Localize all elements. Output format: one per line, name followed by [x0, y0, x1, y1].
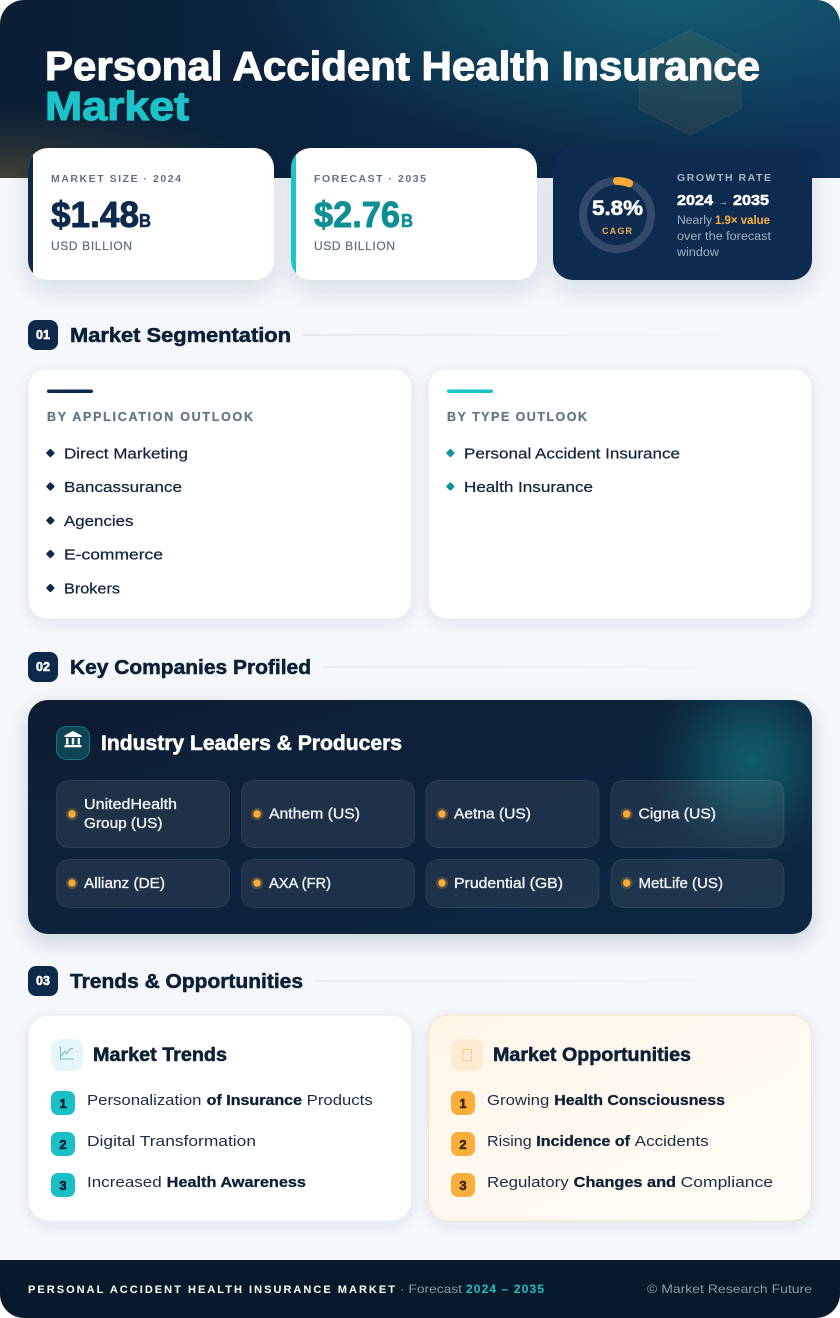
panel: by type outlook: Health Insurance — [464, 479, 593, 496]
stat card: forecast: B — [401, 211, 413, 231]
opportunity 3: Changes and — [574, 1174, 676, 1191]
section heading 01 — [28, 320, 570, 350]
stat card: market size: B — [139, 211, 151, 231]
opportunity 2 — [451, 1132, 709, 1156]
footer — [0, 1260, 840, 1318]
footer: · Forecast — [400, 1282, 463, 1296]
trend 1 — [51, 1091, 373, 1115]
company chip: Allianz — [56, 860, 230, 908]
opportunity 2: Incidence of — [536, 1133, 631, 1150]
trend 3: Increased — [87, 1174, 162, 1191]
company chip: MetLife — [611, 860, 784, 908]
company chip: Anthem: Anthem (US) — [269, 806, 360, 822]
trend 2 — [51, 1132, 256, 1156]
title — [47, 50, 760, 121]
growth text — [676, 172, 772, 259]
icon: line chart — [51, 1039, 83, 1071]
company chip: Cigna: Cigna (US) — [638, 806, 716, 822]
opportunity 1: Growing — [487, 1092, 549, 1109]
title: Personal Accident Health Insurance — [45, 43, 760, 89]
company chip: Aetna — [426, 780, 599, 848]
opportunity 3: 3 — [459, 1178, 467, 1193]
company chip: Prudential: Prudential (GB) — [454, 876, 563, 892]
panel: by application outlook: Direct Marketing — [64, 445, 188, 462]
company chip: Cigna — [611, 780, 784, 848]
company chip: UnitedHealth Group: Group (US) — [84, 816, 162, 832]
company chip: Allianz: Allianz (DE) — [84, 876, 165, 892]
panel: by application outlook: E-commerce — [64, 546, 163, 563]
company chip: Aetna: Aetna (US) — [454, 806, 531, 822]
section heading 02: Key Companies Profiled — [70, 657, 311, 679]
trend 1: Products — [307, 1092, 373, 1109]
growth text: 1.9× value — [715, 215, 770, 227]
opportunity 3: Compliance — [681, 1174, 773, 1191]
trend 1: of Insurance — [207, 1092, 302, 1109]
section heading 03: 03 — [36, 974, 50, 988]
company chip: AXA — [242, 860, 414, 908]
company chip: Anthem — [242, 780, 414, 848]
growth text: → — [719, 196, 728, 208]
footer: © Market Research Future — [647, 1282, 812, 1296]
growth text: 2024 — [677, 192, 714, 209]
company chip: AXA: AXA (FR) — [269, 876, 331, 892]
section heading 02: 02 — [36, 660, 50, 674]
section heading 03 — [28, 966, 576, 996]
trend 2: Digital Transformation — [87, 1133, 256, 1150]
opportunity 3: Regulatory — [487, 1174, 569, 1191]
stat card: market size: MARKET SIZE · 2024 — [51, 173, 181, 185]
company chip: Prudential — [426, 860, 599, 908]
opportunity 1: Health Consciousness — [554, 1092, 725, 1109]
stat card: forecast: FORECAST · 2035 — [314, 173, 426, 185]
panel: industry leaders — [28, 700, 812, 934]
panel: by type outlook: BY TYPE OUTLOOK — [447, 410, 587, 424]
company chip: MetLife: MetLife (US) — [638, 876, 723, 892]
stat card: forecast — [291, 148, 537, 280]
opportunity 2: Rising — [487, 1133, 532, 1150]
title: Market — [45, 83, 189, 129]
hero header — [0, 0, 840, 178]
opportunity 1: 1 — [459, 1096, 467, 1111]
company chip: UnitedHealth Group: UnitedHealth — [84, 797, 177, 813]
footer: PERSONAL ACCIDENT HEALTH INSURANCE MARKET — [28, 1284, 395, 1296]
section heading 03: Trends & Opportunities — [70, 971, 303, 993]
icon: bank — [56, 726, 90, 760]
section heading 01: Market Segmentation — [70, 325, 291, 347]
trend 3: 3 — [59, 1178, 67, 1193]
stat card: forecast: USD BILLION — [314, 239, 395, 253]
growth text: window — [676, 247, 720, 259]
panel: market opportunities — [428, 1015, 812, 1221]
panel: by application outlook: Brokers — [64, 580, 120, 597]
trend 1: 1 — [59, 1096, 67, 1111]
CAGR ring — [583, 181, 651, 249]
panel: market trends — [28, 1015, 412, 1221]
stat card: market size: $1.48 — [51, 194, 139, 235]
panel: by application outlook: BY APPLICATION OUTLOOK — [47, 410, 253, 424]
panel: by type outlook — [428, 369, 812, 619]
panel: by application outlook: Bancassurance — [64, 479, 182, 496]
CAGR ring: CAGR — [602, 226, 632, 236]
trend 1: Personalization — [87, 1092, 202, 1109]
trend 3 — [51, 1173, 306, 1197]
hexagon decoration — [639, 30, 741, 135]
growth text: GROWTH RATE — [677, 172, 771, 184]
growth text: 2035 — [733, 192, 769, 209]
trend 2: 2 — [59, 1137, 67, 1152]
section heading 01: 01 — [36, 328, 50, 342]
stat card: forecast: $2.76 — [314, 194, 400, 235]
growth text: over the forecast — [677, 231, 772, 243]
company chip: UnitedHealth Group — [56, 780, 230, 848]
panel: market trends: Market Trends — [93, 1045, 227, 1066]
panel: by application outlook: Agencies — [64, 513, 134, 530]
panel: by application outlook — [28, 369, 412, 619]
growth text: Nearly — [677, 215, 712, 227]
panel: market opportunities: Market Opportunities — [493, 1045, 691, 1066]
CAGR ring: 5.8% — [592, 197, 643, 220]
section heading 02 — [28, 652, 580, 682]
stat card: market size — [28, 148, 274, 280]
footer: 2024 – 2035 — [466, 1282, 544, 1296]
growth rate card — [553, 148, 812, 280]
stat card: market size: USD BILLION — [51, 239, 132, 253]
trend 3: Health Awareness — [167, 1174, 306, 1191]
panel: by type outlook: Personal Accident Insurance — [464, 445, 680, 462]
opportunity 2: 2 — [459, 1137, 467, 1152]
opportunity 1 — [451, 1091, 725, 1115]
opportunity 3 — [451, 1173, 773, 1197]
panel heading: Industry Leaders & Producers — [101, 732, 402, 755]
opportunity 2: Accidents — [635, 1133, 709, 1150]
icon: missing glyph box — [451, 1039, 483, 1071]
